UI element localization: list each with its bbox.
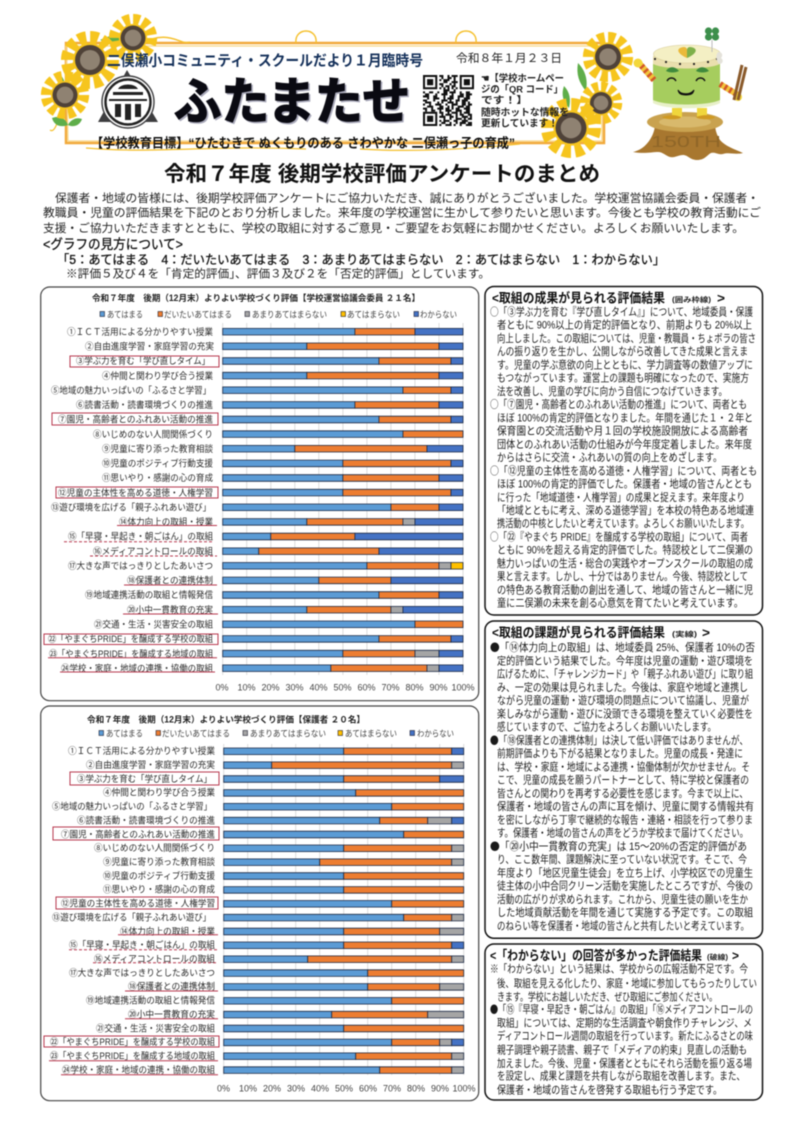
x axis labels: 80%: [405, 682, 424, 692]
x axis labels: 0%: [217, 1084, 230, 1094]
legend: だいたいあてはまる: [164, 310, 232, 320]
unknown answers text: [490, 963, 757, 1097]
legend: わからない: [417, 728, 454, 738]
row labels: ⑥読書活動・読書環境づくりの推進: [76, 399, 213, 410]
challenge text: 活動の広がりが求められます。これから、児童生徒の願いを生か: [497, 893, 748, 906]
row labels: ㉔学校・家庭・地域の連携・協働の取組: [61, 662, 213, 673]
legend: あまりあてはまらない: [252, 310, 327, 320]
legend: [100, 310, 457, 320]
x axis labels: 10%: [239, 1084, 257, 1094]
row labels: ②自由進度学習・家庭学習の充実: [86, 759, 215, 770]
challenge text: 定的評価という結果でした。今年度は児童の運動・遊び環境を: [497, 654, 753, 667]
row labels: ②自由進度学習・家庭学習の充実: [85, 340, 214, 352]
QR caption: 随時ホットな情報を: [481, 106, 569, 118]
row labels: ⑰大きな声ではっきりとしたあいさつ: [68, 560, 213, 571]
challenge text: 皆さんとの関わりを再考する必要性を感じます。今まで以上に、: [497, 787, 748, 800]
x axis labels: 20%: [263, 1084, 281, 1094]
x axis labels: 10%: [237, 682, 256, 692]
panel heading: <取組の成果が見られる評価結果: [492, 290, 665, 306]
row labels: ⑫児童の主体性を高める道徳・人権学習: [61, 898, 215, 909]
unknown answers text: ※「わからない」という結果は、学校からの広報活動不足です。今: [490, 963, 748, 976]
graph reading guide: [43, 237, 665, 280]
icon: QR code: [422, 74, 475, 127]
row labels: ⑯メディアコントロールの取組: [94, 953, 215, 964]
chart title: 令和７年度 後期（12月末）よりよい学校づくり評価【保護者 ２０名】: [87, 714, 365, 724]
achievement text: ○「⑫児童の主体性を高める道徳・人権学習」について、両者とも: [490, 463, 757, 478]
achievement text: 童に二俣瀬の未来を創る心意気を育てたいと考えています。: [497, 597, 743, 610]
achievement text: ○「㉒『やまぐち PRIDE』を醸成する学校の取組」について、両者: [490, 530, 748, 544]
achievement text: ほぼ 100%の肯定的評価でした。保護者・地域の皆さんととも: [497, 478, 752, 490]
row labels: ⑨児童に寄り添った教育相談: [102, 443, 213, 454]
row labels: ⑳小中一貫教育の充実: [128, 1008, 215, 1019]
row labels: ⑪思いやり・感謝の心の育成: [102, 472, 213, 483]
panel heading: (破線): [707, 952, 728, 962]
x axis labels: 90%: [431, 1084, 449, 1094]
challenge text: 保護者・地域の皆さんの声に耳を傾け、児童に関する情報共有: [497, 800, 754, 813]
QR caption: ☚【学校ホームペー: [481, 72, 564, 84]
challenge text: ながら児童の運動・遊び環境の問題点について協議し、児童が: [497, 694, 749, 707]
QR caption: です！】: [481, 96, 528, 106]
row labels: ㉑交通・生活・災害安全の取組: [96, 1022, 215, 1033]
challenge text: 感じていますので、ご協力をよろしくお願いいたします。: [497, 721, 716, 734]
challenge text: 徒主体の小中合同クリーン活動を実施したところですが、今後の: [497, 880, 753, 893]
x axis labels: 40%: [311, 1084, 329, 1094]
unknown answers text: 保護者・地域の皆さんを啓発する取組も行う予定です。: [497, 1084, 722, 1097]
stacked bars: [223, 328, 463, 672]
leaves: [52, 34, 587, 126]
row labels: ⑭体力向上の取組・授業: [119, 516, 213, 527]
row labels: ⑥読書活動・読書環境づくりの推進: [77, 814, 215, 825]
row labels: ③学ぶ力を育む「学び直しタイム」: [76, 355, 210, 366]
highlighted labels: [44, 772, 219, 1075]
row labels: ③学ぶ力を育む「学び直しタイム」: [77, 773, 212, 784]
row labels: ①ＩＣＴ活用による分かりやすい授業: [67, 326, 213, 337]
row labels: ⑦園児・高齢者とのふれあい活動の推進: [58, 414, 213, 425]
achievement text: 者ともに 90%以上の肯定的評価となり、前期よりも 20%以上: [497, 319, 752, 332]
legend: あてはまらない: [347, 310, 400, 320]
panel heading: <取組の課題が見られる評価結果: [492, 625, 665, 640]
legend: あてはまらない: [345, 728, 397, 738]
row labels: ⑧いじめのない人間関係づくり: [94, 842, 215, 853]
x axis labels: 30%: [285, 682, 304, 692]
panel heading: >: [732, 948, 739, 963]
x axis labels: 70%: [383, 1084, 401, 1094]
x axis labels: 0%: [215, 682, 229, 692]
x axis labels: 70%: [381, 682, 400, 692]
grid lines: [224, 744, 464, 1075]
school goal: 【学校教育目標】“ひたむきで ぬくもりのある さわやかな 二俣瀬っ子の育成”: [91, 136, 515, 150]
x axis labels: 100%: [451, 682, 475, 692]
achievement text: んの振り返りを生かし、公開しながら改善してきた成果と言えま: [497, 345, 748, 358]
panel: guardians chart: [41, 706, 479, 1101]
challenge text: を密にしながら丁寧で継続的な報告・連絡・相談を行って参りま: [497, 813, 753, 826]
challenge text: り、ここ数年間、課題解決に至っていない状況です。そこで、今: [497, 853, 747, 866]
achievement text: 法を改善し、児童の学びに向かう自信につなげていきます。: [497, 385, 727, 398]
achievement text: ○「⑦園児・高齢者とのふれあい活動の推進」について、両者とも: [490, 397, 747, 412]
icon: drum mascot on stump: [633, 27, 746, 160]
row labels: ㉒「やまぐちPRIDE」を醸成する学校の取組: [48, 633, 213, 644]
header banner: [48, 21, 746, 160]
legend: わからない: [420, 310, 457, 320]
achievement text: 「地域とともに考え、深める道徳学習」を本校の特色ある地域連: [497, 504, 754, 517]
chart title: 令和７年度 後期（12月末）よりよい学校づくり評価【学校運営協議会委員 ２１名】: [92, 292, 420, 303]
x axis labels: [215, 682, 475, 692]
rope frame: [50, 31, 604, 150]
challenge text: [490, 640, 755, 932]
panel heading: >: [717, 290, 725, 306]
row labels: ④仲間と関わり学び合う授業: [102, 370, 213, 381]
achievement text: 魅力いっぱいの生活・総合の実践やオープンスクールの取組の成: [497, 557, 753, 570]
unknown answers text: 親子調理や親子読書、親子で「メディアの約束」見直しの活動も: [497, 1044, 747, 1057]
achievement text: に行った「地域道徳・人権学習」の成果と捉えます。来年度より: [497, 491, 745, 504]
achievement text: からはさらに交流・ふれあいの質の向上をめざします。: [497, 451, 722, 464]
intro paragraph: 支援・ご協力いただきますとともに、学校の取組に対するご意見・ご要望をお気軽にお聞かせください。よろしくお願いいたします。: [43, 221, 744, 235]
x axis labels: 80%: [407, 1084, 425, 1094]
row labels: ㉑交通・生活・災害安全の取組: [94, 618, 213, 630]
row labels: ⑤地域の魅力いっぱいの「ふるさと学習」: [51, 384, 211, 395]
row labels: ⑲地域連携活動の取組と情報発信: [85, 589, 213, 600]
row labels: [50, 745, 215, 1075]
row labels: ㉔学校・家庭・地域の連携・協働の取組: [62, 1064, 215, 1075]
panel heading: >: [702, 625, 710, 640]
challenge text: ●「⑭体力向上の取組」は、地域委員 25%、保護者 10%の否: [490, 640, 755, 655]
masthead title: ふたまたせ: [174, 74, 410, 130]
panel: results showing achievements: [485, 286, 762, 615]
row labels: ⑬遊び環境を広げる「親子ふれあい遊び」: [51, 502, 211, 512]
x axis labels: 60%: [359, 1084, 377, 1094]
row labels: ⑳小中一貫教育の充実: [127, 604, 213, 615]
row labels: ⑰大きな声ではっきりとしたあいさつ: [69, 967, 215, 978]
legend: だいたいあてはまる: [162, 728, 230, 738]
row labels: ④仲間と関わり学び合う授業: [103, 787, 215, 798]
x axis labels: 30%: [287, 1084, 305, 1094]
legend: あてはまる: [107, 310, 143, 320]
row labels: ㉓「やまぐちPRIDE」を醸成する地域の取組: [50, 1050, 215, 1061]
row labels: ㉒「やまぐちPRIDE」を醸成する学校の取組: [50, 1036, 215, 1047]
newsletter name: 二俣瀬小コミュニティ・スクールだより１月臨時号: [107, 52, 423, 70]
graph reading guide: 「5：あてはまる 4：だいたいあてはまる 3：あまりあてはまらない 2：あてはまらない 1：わからない」: [57, 253, 665, 267]
icon: drum mascot on stump: 150TH: [651, 134, 721, 151]
row labels: ⑨児童に寄り添った教育相談: [103, 856, 215, 867]
row labels: ⑦園児・高齢者とのふれあい活動の推進: [61, 828, 215, 839]
row labels: ⑩児童のポジティブ行動支援: [102, 458, 213, 469]
row labels: ⑤地域の魅力いっぱいの「ふるさと学習」: [52, 800, 212, 812]
x axis labels: 40%: [309, 682, 328, 692]
legend: [99, 728, 454, 738]
legend: あまりあてはまらない: [250, 728, 326, 738]
achievement text: [490, 304, 757, 610]
unknown answers text: 取組」については、定期的な生活調査や朝食作りチャレンジ、メ: [497, 1016, 752, 1029]
achievement text: 保育園との交流活動や月１回の学校施設開放による高齢者: [497, 425, 748, 438]
row labels: ⑯メディアコントロールの取組: [93, 545, 213, 556]
row labels: ⑫児童の主体性を高める道徳・人権学習: [58, 487, 213, 498]
highlighted labels: [44, 356, 219, 672]
challenge text: ●「⑳小中一貫教育の充実」は 15～20%の否定的評価があ: [490, 839, 747, 854]
challenge text: した地域貢献活動を年間を通じて実施する予定です。この取組: [497, 906, 753, 919]
intro paragraph: 教職員・児童の評価結果を下記のとおり分析しました。来年度の学校運営に生かして参りたいと思います。今後とも学校の教育活動にご: [43, 206, 761, 220]
x axis labels: 50%: [333, 682, 352, 692]
panel: results with many unknown answers: [485, 944, 762, 1100]
masthead title: ふたまたせ: [176, 76, 412, 132]
x axis labels: 90%: [429, 682, 448, 692]
row labels: ⑲地域連携活動の取組と情報発信: [86, 995, 215, 1006]
grid lines: [223, 323, 463, 675]
achievement text: ほぼ 100%の肯定的評価となりました。年間を通じた１・２年と: [497, 411, 753, 424]
achievement text: ともに 90%を超える肯定的評価でした。特認校として二俣瀬の: [497, 544, 753, 557]
icon: sunflowers: [48, 21, 625, 149]
challenge text: は、学校・家庭・地域による連携・協働体制が欠かせません。そ: [497, 760, 750, 773]
date: 令和８年１月２３日: [456, 51, 562, 65]
row labels: ⑱保護者との連携体制: [128, 981, 215, 992]
challenge text: 年度より「地区児童生徒会」を立ち上げ、小学校区での児童生: [497, 866, 753, 879]
panel heading: (実線): [672, 629, 697, 638]
panel: results showing challenges: [485, 621, 762, 938]
achievement text: 団体とのふれあい活動の仕組みが今年度定着しました。来年度: [497, 438, 752, 451]
row labels: ①ＩＣＴ活用による分かりやすい授業: [68, 745, 215, 756]
x axis labels: [217, 1084, 476, 1094]
graph reading guide: <グラフの見方について>: [43, 237, 183, 252]
graph reading guide: ※評価５及び４を「肯定的評価」、評価３及び２を「否定的評価」としています。: [66, 266, 490, 280]
challenge text: 前期評価よりも下がる結果となりました。児童の成長・発達に: [497, 747, 743, 760]
challenge text: ●「⑱保護者との連携体制」は決して低い評価ではありませんが、: [490, 733, 748, 748]
intro paragraph: 保護者・地域の皆様には、後期学校評価アンケートにご協力いただき、誠にありがとうございました。学校運営協議会委員・保護者・: [55, 191, 759, 205]
stacked bars: [224, 748, 464, 1073]
achievement text: す。児童の学ぶ意欲の向上とともに、学力調査等の数値アップに: [497, 358, 753, 371]
intro paragraph: [43, 191, 761, 235]
row labels: ⑪思いやり・感謝の心の育成: [103, 884, 215, 895]
QR caption: 更新しています！: [481, 118, 558, 130]
unknown answers text: きます。学校にお越しいただき、ぜひ取組にご参加ください。: [497, 990, 717, 1003]
x axis labels: 100%: [452, 1084, 476, 1094]
x axis labels: 50%: [335, 1084, 353, 1094]
challenge text: 楽しみながら運動・遊びに没頭できる環境を整えていく必要性を: [497, 707, 753, 720]
row labels: ⑬遊び環境を広げる「親子ふれあい遊び」: [52, 911, 211, 922]
legend: あてはまる: [106, 728, 143, 738]
achievement text: もつながっています。運営上の課題も明確になったので、実施方: [497, 372, 749, 385]
row labels: [48, 326, 214, 673]
QR caption: [481, 72, 569, 130]
challenge text: こで、児童の成長を願うパートナーとして、特に学校と保護者の: [497, 774, 749, 787]
row labels: ㉓「やまぐちPRIDE」を醸成する地域の取組: [49, 648, 213, 659]
panel heading: <「わからない」の回答が多かった評価結果: [490, 948, 702, 963]
icon: school emblem: [98, 70, 158, 128]
row labels: ⑩児童のポジティブ行動支援: [103, 870, 215, 881]
main heading: 令和７年度 後期学校評価アンケートのまとめ: [164, 163, 600, 186]
panel: committee chart: [41, 287, 479, 701]
x axis labels: 60%: [357, 682, 376, 692]
row labels: ⑱保護者との連携体制: [127, 575, 213, 586]
row labels: ⑧いじめのない人間関係づくり: [93, 428, 213, 439]
x axis labels: 20%: [261, 682, 280, 692]
QR caption: ジの「QR コード」: [481, 84, 563, 96]
row labels: ⑮「早寝・早起き・朝ごはん」の取組: [68, 531, 213, 542]
achievement text: の特色ある教育活動の創出を通して、地域の皆さんと一緒に児: [497, 583, 753, 596]
unknown answers text: を設定し、成果と課題を共有しながら取組を改善します。また、: [497, 1070, 745, 1083]
row labels: ⑭体力向上の取組・授業: [120, 925, 215, 936]
challenge text: み、一定の効果は見られました。今後は、家庭や地域と連携し: [497, 681, 748, 694]
panel heading: (囲み枠線): [672, 295, 711, 304]
row labels: ⑮「早寝・早起き・朝ごはん」の取組: [69, 939, 215, 950]
